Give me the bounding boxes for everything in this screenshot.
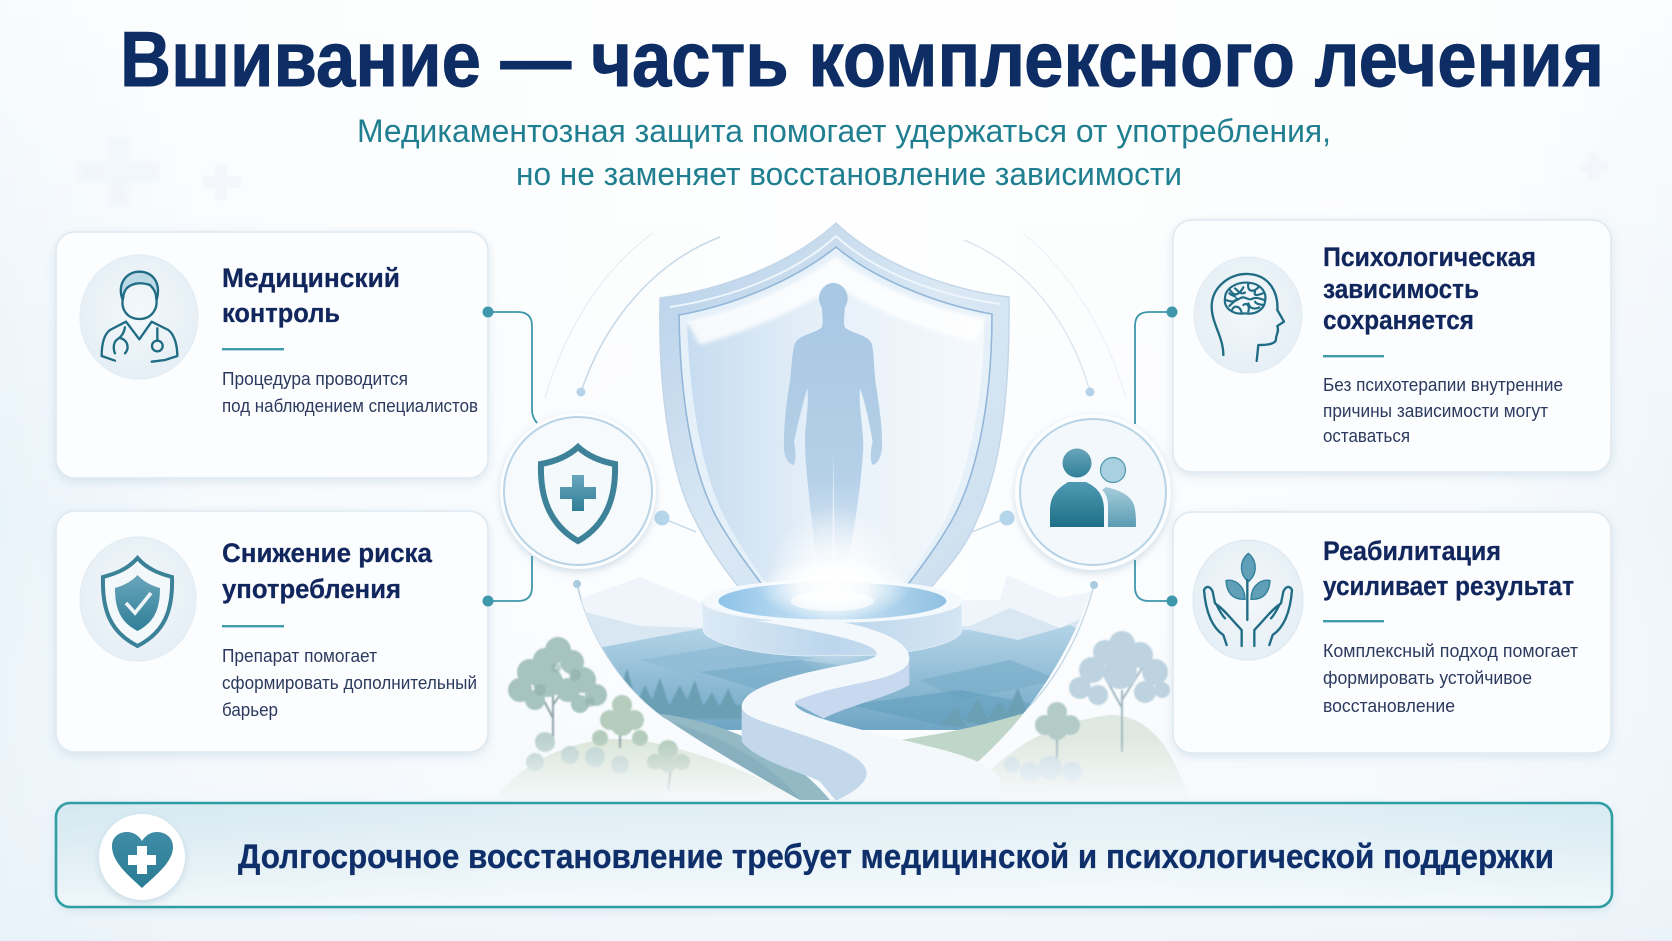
outer hills and trees [504, 630, 1183, 790]
road walls [795, 658, 909, 718]
subtitle: Медикаментозная защита помогает удержаться от употребления, [357, 113, 1331, 149]
icon: heart with cross [99, 814, 185, 900]
left badge: shield with cross [500, 413, 656, 569]
card heading: Медицинский [222, 263, 400, 293]
landscape [577, 575, 1100, 800]
card text: причины зависимости могут [1323, 400, 1548, 421]
card heading [222, 538, 433, 604]
card text [1323, 374, 1563, 446]
card: медицинский контроль [56, 232, 488, 478]
card text [222, 645, 477, 720]
card text: восстановление [1323, 695, 1455, 716]
icon: hands with sprout [1193, 540, 1303, 660]
card text: формировать устойчивое [1323, 667, 1532, 688]
card heading: контроль [222, 298, 340, 328]
card heading: сохраняется [1323, 305, 1474, 335]
card text: Препарат помогает [222, 645, 377, 666]
human silhouette [784, 283, 882, 592]
left trees [508, 637, 690, 790]
card text: Без психотерапии внутренние [1323, 374, 1563, 395]
card: психологическая зависимость [1173, 220, 1611, 472]
card heading: усиливает результат [1323, 571, 1574, 601]
icon: head with brain [1194, 257, 1302, 373]
card heading: Снижение риска [222, 538, 433, 568]
card text: Комплексный подход помогает [1323, 640, 1578, 661]
card heading: Психологическая [1323, 242, 1536, 272]
big shield [660, 223, 1009, 675]
platform and road [702, 557, 1002, 802]
card heading: употребления [222, 574, 401, 604]
central illustration [490, 223, 1190, 805]
card heading [1323, 242, 1536, 335]
forest [610, 668, 1045, 728]
card heading: Реабилитация [1323, 536, 1501, 566]
card text [222, 368, 478, 416]
card heading [1323, 536, 1574, 601]
card text: под наблюдением специалистов [222, 395, 478, 416]
card heading [222, 263, 400, 328]
card text: оставаться [1323, 425, 1410, 446]
icon: shield with check [80, 537, 196, 661]
card: снижение риска [56, 511, 488, 752]
right badge: two people [1015, 414, 1171, 570]
right trees [1004, 631, 1170, 782]
bottom banner [56, 803, 1612, 907]
connectors [482, 306, 1178, 606]
banner text: Долгосрочное восстановление требует медицинской и психологической поддержки [238, 838, 1554, 876]
card text: Процедура проводится [222, 368, 408, 389]
icon: doctor [80, 255, 198, 379]
card text [1323, 640, 1578, 716]
card: реабилитация [1173, 512, 1611, 753]
card text: сформировать дополнительный [222, 672, 477, 693]
card text: барьер [222, 699, 278, 720]
orbit arcs [545, 233, 1126, 718]
subtitle: но не заменяет восстановление зависимости [516, 156, 1182, 192]
card heading: зависимость [1323, 274, 1479, 304]
subtitle [357, 113, 1331, 192]
